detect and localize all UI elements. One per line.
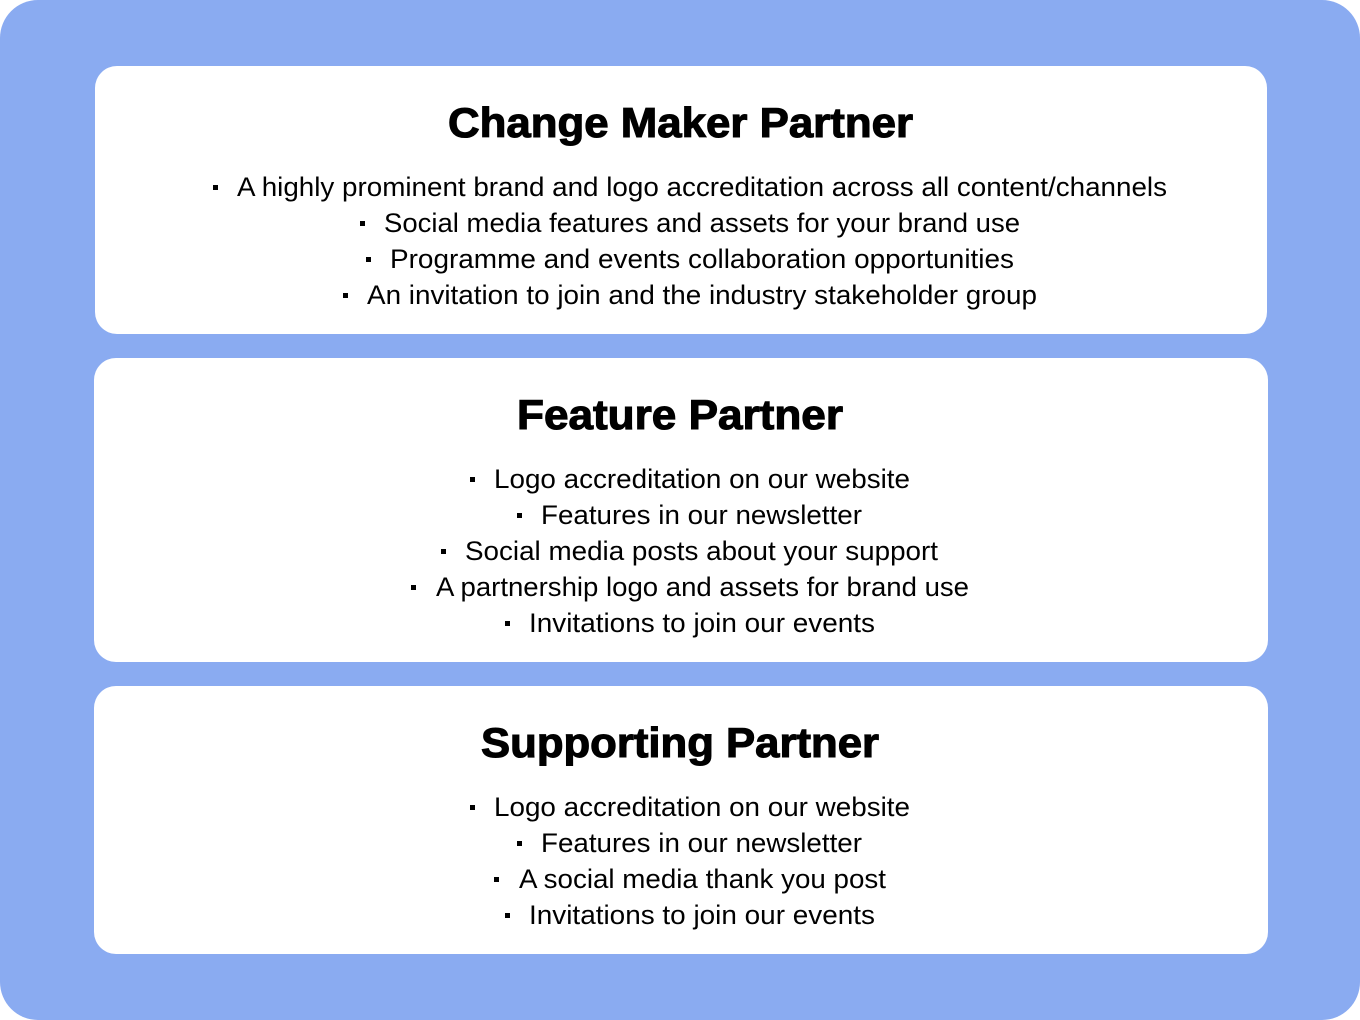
card background: [94, 686, 1268, 954]
bullet list: Invitations to join our events: [529, 900, 875, 930]
bullet list: Programme and events collaboration opportunities: [390, 244, 1014, 274]
bullet list: A partnership logo and assets for brand use: [436, 572, 969, 602]
bullet list: Logo accreditation on our website: [494, 792, 910, 822]
heading: Change Maker Partner: Change Maker Partner: [448, 99, 913, 146]
card background: [94, 358, 1268, 662]
panel: Change Maker Partner: [95, 66, 1267, 334]
bullet list: Features in our newsletter: [541, 828, 862, 858]
bullet list: [411, 464, 969, 638]
bullet list: [213, 172, 1167, 310]
bullet list: Features in our newsletter: [541, 500, 862, 530]
bullet list: A highly prominent brand and logo accreditation across all content/channels: [237, 172, 1167, 202]
panel: Feature Partner: [94, 358, 1268, 662]
bullet list: Logo accreditation on our website: [494, 464, 910, 494]
heading: Supporting Partner: Supporting Partner: [481, 719, 879, 766]
heading: Feature Partner: Feature Partner: [517, 391, 843, 438]
panel: Supporting Partner: [94, 686, 1268, 954]
bullet list: Social media posts about your support: [465, 536, 939, 566]
bullet list: Invitations to join our events: [529, 608, 875, 638]
bullet list: An invitation to join and the industry stakeholder group: [367, 280, 1037, 310]
bullet list: [470, 792, 910, 930]
bullet list: Social media features and assets for your brand use: [384, 208, 1020, 238]
bullet list: A social media thank you post: [519, 864, 887, 894]
card background: [95, 66, 1267, 334]
